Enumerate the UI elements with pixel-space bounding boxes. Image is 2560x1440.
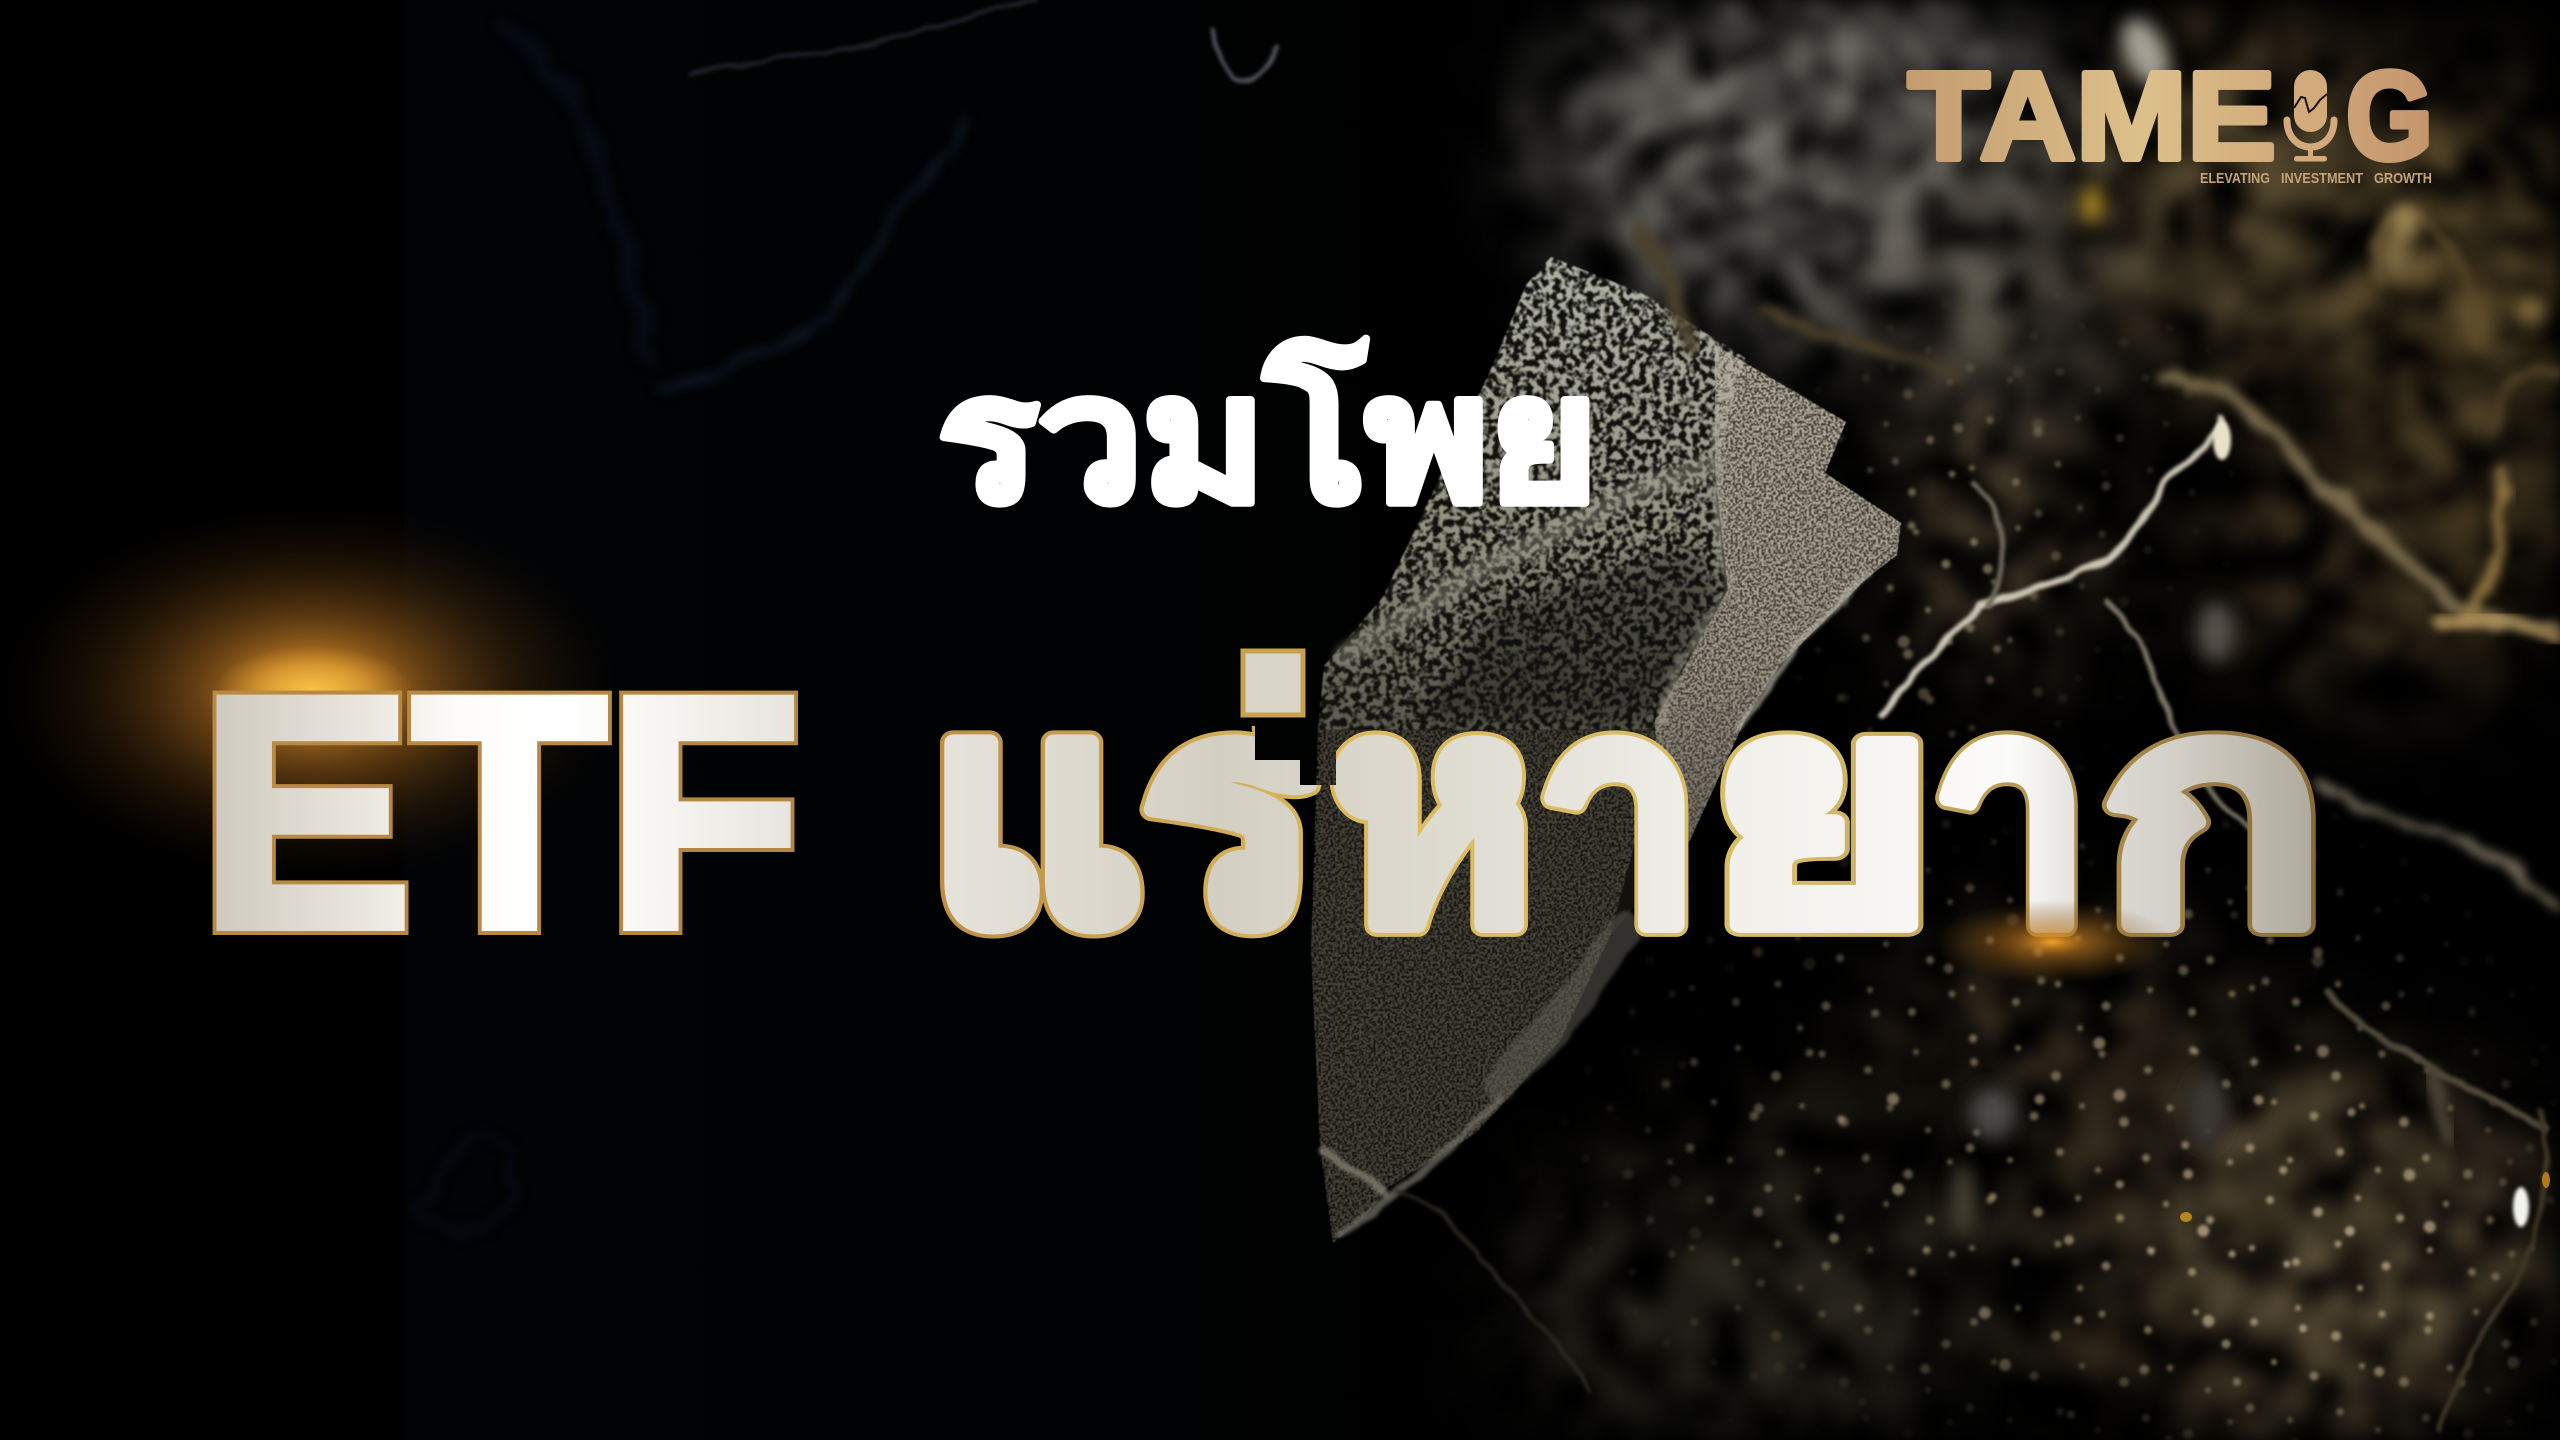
title: rare earths in Thai: ห bbox=[1331, 642, 1534, 986]
glow: orange flare under ETF word end bbox=[1932, 900, 2172, 984]
logo wordmark bbox=[1908, 47, 2433, 186]
logo tagline: INVESTMENT bbox=[2281, 170, 2363, 187]
title: rare earths in Thai bbox=[927, 642, 2324, 986]
title: rare earths in Thai: า bbox=[1538, 642, 1700, 986]
title: rare earths in Thai: า bbox=[1933, 642, 2089, 986]
title: rare earths in Thai: ก bbox=[2103, 642, 2324, 986]
title: rare earths in Thai: แ bbox=[927, 642, 1143, 986]
background: quartz right strip, fine grain bbox=[1655, 345, 1901, 860]
background: quartz lower zone, fine grain bbox=[1311, 730, 1665, 1243]
logo wordmark: G bbox=[2346, 47, 2433, 186]
background: pale bands inside quartz bbox=[1322, 430, 1868, 1235]
background: soft rock tones bbox=[1540, 0, 2560, 1430]
background: bright mineral blobs bbox=[1951, 11, 2548, 1236]
title: rare earths in Thai: ย bbox=[1708, 642, 1935, 986]
background: faint dark-blue streaks on the left bbox=[415, 0, 1274, 1232]
background: round gold speckles bbox=[1584, 324, 2556, 1440]
title: rare earths in Thai: า bbox=[1933, 642, 2089, 986]
background: pale quartz patch, left lobe cells bbox=[1318, 257, 1745, 730]
title: rare earths in Thai: ร่ bbox=[1142, 642, 1320, 986]
logo wordmark: TAME bbox=[1908, 47, 2276, 186]
title: rare earths in Thai: ก bbox=[2103, 642, 2324, 986]
background: pale quartz patch, base bbox=[1311, 257, 1901, 1243]
background: gold veins, right edge bbox=[2375, 214, 2560, 640]
title: ETF: ETF bbox=[200, 628, 801, 996]
title: rare earths in Thai: ร่ bbox=[1142, 642, 1320, 986]
logo: TAMEIG bbox=[1908, 47, 2433, 187]
glow: orange lens flare behind E bbox=[0, 497, 638, 887]
logo tagline: ELEVATING bbox=[2200, 170, 2270, 187]
title: rare earths in Thai: ย bbox=[1708, 642, 1935, 986]
tone bar above the ร bbox=[1243, 651, 1303, 715]
title: rare earths in Thai: ห bbox=[1331, 642, 1534, 986]
background: faint navy panel from x=404 bbox=[404, 0, 1500, 1440]
title: rare earths in Thai: า bbox=[1538, 642, 1700, 986]
background: mottled grey mineral, upper right bbox=[1510, 0, 2550, 1430]
heading: subtitle: รวมโพย bbox=[938, 338, 1598, 538]
background: dark inner zone of quartz bbox=[1420, 545, 1722, 720]
background: cream mineral veins bbox=[1398, 230, 2560, 1430]
logo tagline bbox=[2200, 170, 2432, 187]
title: rare earths in Thai: แ bbox=[927, 642, 1143, 986]
icon: bright crystals bbox=[2180, 420, 2550, 1227]
background: quartz right strip, base tone bbox=[1655, 345, 1901, 860]
icon: microphone bbox=[2287, 70, 2334, 162]
logo tagline: GROWTH bbox=[2374, 170, 2432, 187]
title: ETF: ETF bbox=[200, 628, 801, 996]
